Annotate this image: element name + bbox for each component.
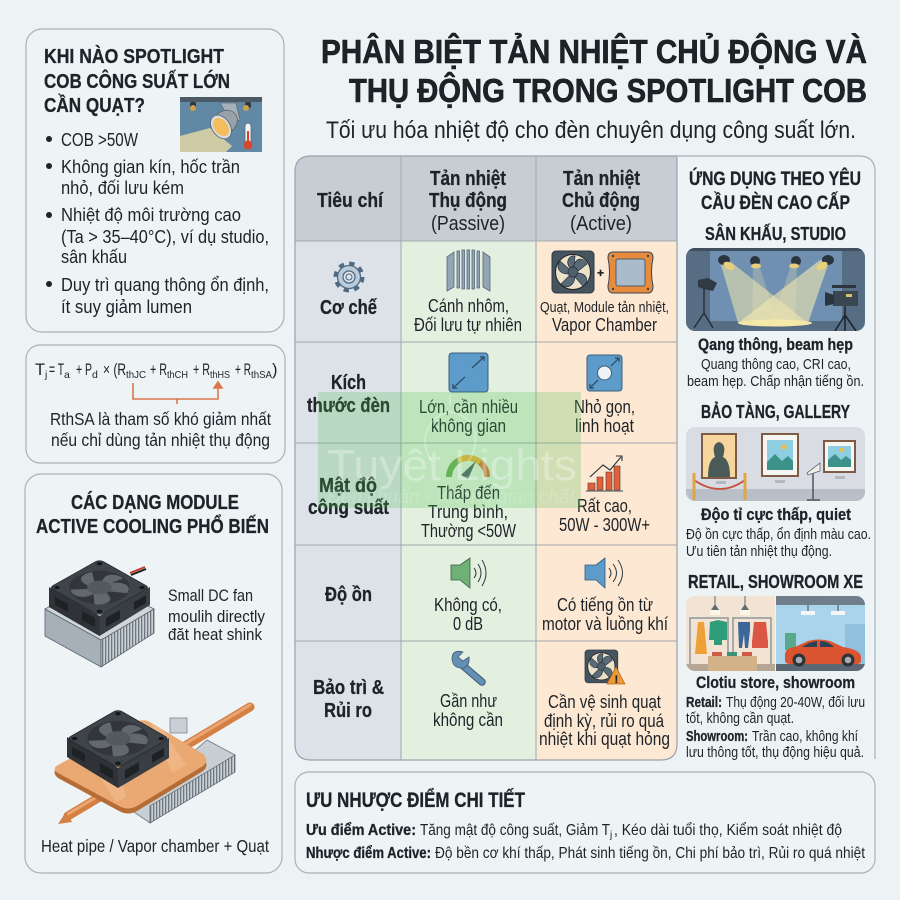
stage description (687, 335, 864, 390)
cell: active noise (542, 558, 668, 634)
pros line: j (609, 830, 612, 841)
formula: T (35, 361, 45, 379)
table header: active: (Active) (570, 213, 632, 235)
formula: + R (235, 361, 251, 379)
bullet list: sân khấu (61, 246, 127, 267)
illustration: DC fan on heat sink (45, 560, 154, 667)
cell: passive size (419, 353, 518, 436)
cell: active density: 50W - 300W+ (559, 515, 650, 535)
row label: maintenance and risk: Bảo trì & (313, 677, 384, 699)
cell: passive maintenance: không cần (433, 710, 503, 730)
row label: maintenance and risk (313, 677, 384, 722)
table header: criteria: Tiêu chí (317, 190, 384, 212)
row label: mechanism (320, 264, 378, 319)
watermark: Đèn chuẩn - Không gian chất (327, 487, 576, 508)
formula: × (R (103, 361, 126, 379)
label: heat pipe: Heat pipe / Vapor chamber + Quạt (41, 836, 269, 856)
formula: thHS (210, 369, 230, 381)
subheading: retail: RETAIL, SHOWROOM XE (688, 572, 863, 592)
panel: when fan is needed (26, 29, 284, 332)
cell: passive noise: 0 dB (453, 614, 483, 634)
cell: active mechanism (540, 251, 669, 335)
label: small DC fan: đăt heat shink (168, 625, 262, 644)
label: small DC fan: moulih directly (168, 607, 265, 626)
row label: noise: Độ ồn (325, 584, 372, 606)
watermark (318, 392, 581, 508)
heading: when fan is needed: KHI NÀO SPOTLIGHT (44, 45, 224, 68)
formula: = T (49, 361, 64, 379)
pros line: Ưu điểm Active: (306, 821, 416, 839)
bullet list: Không gian kín, hốc trần (61, 156, 240, 177)
icon: gauge (449, 458, 487, 479)
cell: passive mechanism: Đối lưu tự nhiên (414, 315, 522, 335)
heading: applications: ỨNG DỤNG THEO YÊU (689, 168, 861, 190)
cell: active maintenance: định kỳ, rủi ro quá (544, 711, 665, 731)
bullet list: COB >50W (61, 129, 138, 150)
cell: active size: linh hoạt (575, 416, 634, 436)
icon: rising bars (586, 456, 623, 491)
formula: + P (76, 361, 92, 379)
panel: thermal formula (26, 345, 285, 463)
bullet list: Duy trì quang thông ổn định, (61, 274, 269, 295)
row label: lamp size: thước đèn (307, 395, 390, 417)
icon: fan warning: ! (614, 674, 618, 686)
heading: applications (689, 168, 861, 214)
row label: power density: Mật độ (319, 475, 377, 497)
formula (35, 361, 278, 381)
heading: modules (36, 491, 269, 538)
icon: large size arrows (449, 353, 488, 392)
cell: passive maintenance: Gần như (440, 691, 497, 711)
cell: active density: Rất cao, (577, 496, 632, 516)
retail description (686, 673, 865, 761)
bullet list: (Ta > 35–40°C), ví dụ studio, (61, 226, 269, 247)
label: small DC fan: Small DC fan (168, 586, 253, 605)
table header: passive: Tản nhiệt (430, 168, 506, 190)
table header: active (562, 168, 640, 235)
cell: active size (574, 355, 635, 436)
cell: passive mechanism (414, 250, 522, 335)
cell: passive noise: Không có, (434, 595, 502, 615)
subheading: museum: BẢO TÀNG, GALLERY (701, 401, 850, 422)
cell: active mechanism: Quạt, Module tản nhiệt, (540, 299, 669, 316)
formula: thSA (251, 369, 272, 381)
museum description (686, 505, 871, 560)
stage description: beam hẹp. Chấp nhận tiếng ồn. (687, 373, 864, 390)
cell: passive density: Thường <50W (421, 521, 516, 541)
cell: passive density: Thấp đến (437, 483, 500, 503)
cell: active mechanism: Vapor Chamber (552, 315, 657, 335)
icon: fan plus module: + (597, 266, 604, 280)
formula: a (64, 369, 70, 381)
cons line: Nhược điểm Active: (306, 844, 431, 862)
formula: + R (193, 361, 210, 379)
table header: active: Chủ động (562, 190, 640, 212)
cell: passive mechanism: Cánh nhôm, (428, 296, 509, 316)
cons line (306, 844, 865, 862)
retail description: Thụ động 20-40W, đối lưu (726, 694, 865, 711)
retail description: Clotiu store, showroom (696, 673, 855, 692)
formula: + R (150, 361, 167, 379)
heading: modules: ACTIVE COOLING PHỔ BIẾN (36, 514, 269, 538)
table header: active: Tản nhiệt (563, 168, 640, 190)
illustration: heat pipe and vapor chamber with fan (54, 705, 250, 824)
panel: pros and cons (295, 772, 875, 873)
panel: comparison table (295, 156, 677, 760)
label: small DC fan (168, 586, 265, 644)
icon: green speaker (451, 558, 486, 588)
formula: thJC (126, 369, 146, 381)
icon: blue speaker (585, 558, 622, 588)
icon: aluminium fins (447, 250, 490, 291)
illustration: retail and showroom (686, 596, 865, 671)
table header: passive: Thụ động (429, 190, 507, 212)
heading: applications: CẦU ĐÈN CAO CẤP (701, 192, 850, 214)
cell: passive size: Lớn, cần nhiều (419, 397, 518, 417)
icon: spotlight with thermometer (180, 97, 262, 152)
cell: active size: Nhỏ gọn, (574, 397, 635, 417)
heading: when fan is needed: COB CÔNG SUẤT LỚN (44, 69, 230, 93)
bullet list: Nhiệt độ môi trường cao (61, 204, 241, 225)
cell: active density (559, 456, 650, 535)
bullet list (46, 129, 269, 317)
retail description: Retail: (686, 694, 722, 711)
bullet list: nhỏ, đối lưu kém (61, 177, 184, 198)
cell: active noise: Có tiếng ồn từ (557, 595, 653, 615)
heading: pros and cons: ƯU NHƯỢC ĐIỂM CHI TIẾT (306, 789, 525, 812)
heading: modules: CÁC DẠNG MODULE (71, 491, 239, 514)
row label: lamp size: Kích (331, 372, 366, 394)
museum description: Ưu tiên tản nhiệt thụ động. (686, 543, 832, 560)
row label: power density (308, 475, 389, 519)
illustration: stage studio (686, 248, 865, 331)
pros line: Tăng mật độ công suất, Giảm T (420, 822, 610, 839)
icon: compact size (587, 355, 622, 391)
row label: mechanism: Cơ chế (320, 297, 378, 319)
table header: passive (429, 168, 507, 235)
cell: passive density: Trung bình, (428, 502, 508, 522)
formula: thCH (167, 369, 188, 381)
cell: active maintenance (539, 650, 670, 749)
cell: active maintenance: nhiệt khi quạt hỏng (539, 729, 670, 749)
stage description: Qang thông, beam hẹp (698, 335, 853, 354)
heading: when fan is needed: CẦN QUẠT? (44, 94, 145, 117)
table header: passive: (Passive) (431, 213, 505, 235)
illustration: gallery (686, 427, 865, 501)
retail description: Showroom: (686, 728, 748, 745)
formula: d (92, 369, 98, 381)
panel: active cooling modules (25, 474, 282, 873)
cell: passive maintenance (433, 651, 503, 730)
formula note (50, 409, 271, 450)
pros line (306, 821, 842, 841)
stage description: Quang thông cao, CRI cao, (701, 356, 851, 373)
formula note: nếu chỉ dùng tản nhiệt thụ động (51, 430, 270, 450)
cell: passive density (421, 458, 516, 541)
formula note: RthSA là tham số khó giảm nhất (50, 409, 271, 429)
cell: passive noise (434, 558, 502, 634)
row label: lamp size (307, 372, 390, 417)
row label: maintenance and risk: Rủi ro (324, 700, 372, 722)
arrow: bracket to RthHS (133, 382, 222, 404)
cell: passive size: không gian (431, 416, 506, 436)
museum description: Độo tỉ cực thấp, quiet (701, 505, 851, 524)
retail description: tốt, không cần quạt. (686, 710, 794, 727)
icon: gear (336, 264, 362, 290)
row label: power density: công suất (308, 497, 389, 519)
cell: active noise: motor và luồng khí (542, 614, 668, 634)
retail description: lưu thông tốt, thụ động hiệu quả. (686, 744, 864, 761)
subheading: stage: SÂN KHẤU, STUDIO (705, 223, 846, 244)
title (321, 32, 867, 109)
bullet list: ít suy giảm lumen (61, 296, 192, 317)
cell: active maintenance: Cần vệ sinh quạt (548, 692, 661, 712)
icon: wrench (452, 651, 482, 682)
formula: j (44, 370, 47, 381)
retail description: Trần cao, không khí (752, 728, 859, 745)
panel: applications (677, 156, 875, 761)
heading: when fan is needed (44, 45, 230, 117)
formula: ) (272, 361, 278, 379)
watermark: Tuyêt Lights (327, 441, 577, 490)
pros line: , Kéo dài tuổi thọ, Kiểm soát nhiệt độ (614, 821, 842, 839)
